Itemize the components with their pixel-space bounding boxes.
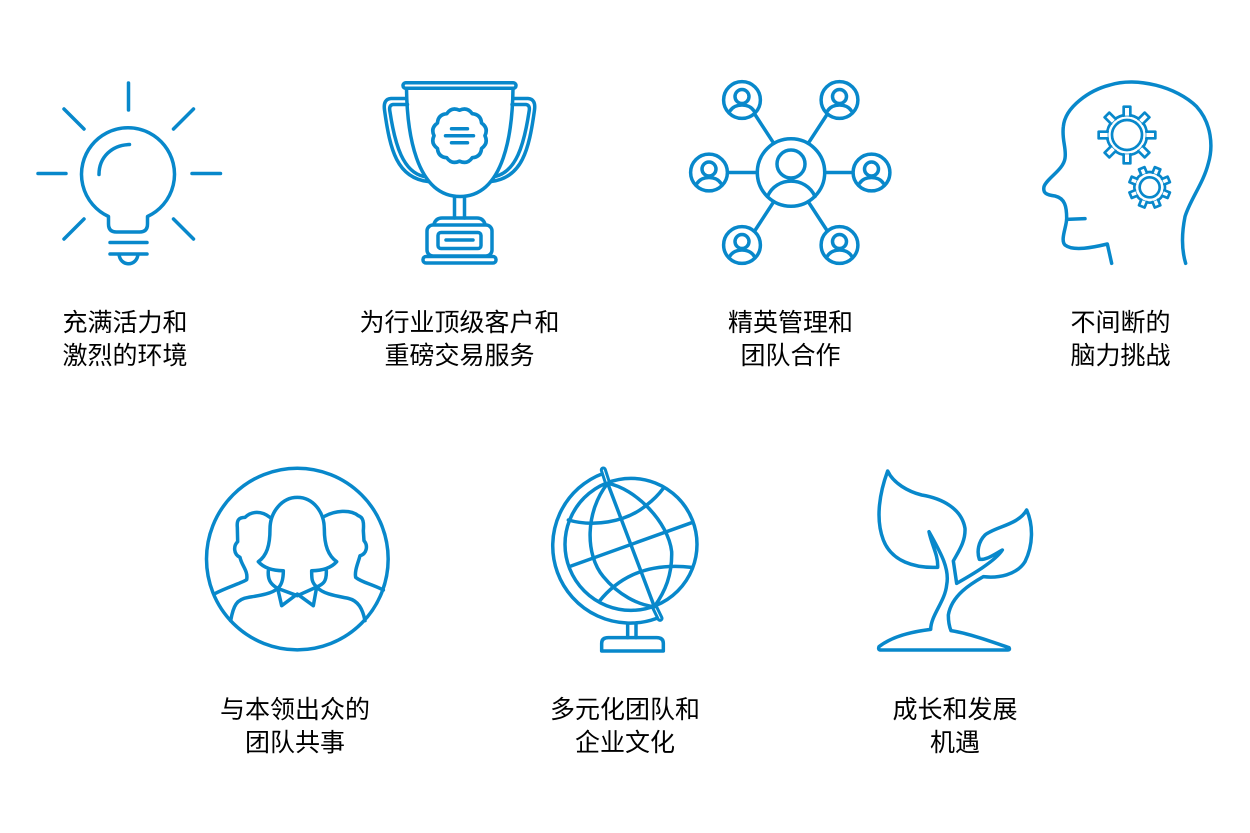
- label: growth: [892, 696, 1018, 757]
- node: middle right: [853, 154, 890, 191]
- label: growth: 机遇: [930, 729, 980, 757]
- node: middle left: [691, 154, 727, 191]
- label: diverse team: 多元化团队和: [550, 696, 700, 724]
- label: elite management: 精英管理和: [728, 309, 853, 337]
- icon: globe: [553, 470, 697, 651]
- label: outstanding team: 与本领出众的: [220, 696, 370, 724]
- label: brain challenge: [1070, 309, 1171, 370]
- panel: diverse team: [550, 470, 700, 757]
- icon: trophy: [384, 83, 535, 263]
- label: elite management: [728, 309, 853, 370]
- label: top clients: 重磅交易服务: [384, 342, 535, 370]
- node: top right: [821, 82, 858, 118]
- icon: sprout: [879, 471, 1031, 650]
- panel: brain challenge: [1044, 82, 1211, 370]
- gear: small: [1129, 167, 1170, 208]
- label: vibrant environment: 充满活力和: [62, 309, 188, 337]
- panel: elite management: [691, 82, 890, 370]
- icon: three people in circle: [206, 468, 388, 650]
- icon: head with gears: [1044, 82, 1211, 263]
- label: growth: 成长和发展: [892, 696, 1018, 724]
- label: diverse team: 企业文化: [575, 729, 675, 757]
- node: top left: [724, 82, 760, 118]
- gear: large: [1099, 107, 1155, 163]
- icon: light bulb: [38, 83, 220, 264]
- label: top clients: [359, 309, 560, 370]
- panel: vibrant environment: [38, 83, 220, 370]
- label: brain challenge: 不间断的: [1070, 309, 1171, 337]
- label: brain challenge: 脑力挑战: [1070, 342, 1171, 370]
- panel: top clients: [359, 83, 560, 370]
- label: outstanding team: 团队共事: [245, 729, 345, 757]
- label: outstanding team: [220, 696, 370, 757]
- label: vibrant environment: [62, 309, 188, 370]
- panel: growth: [879, 471, 1031, 757]
- label: top clients: 为行业顶级客户和: [359, 309, 560, 337]
- label: diverse team: [550, 696, 700, 757]
- node: bottom right: [821, 227, 858, 263]
- label: elite management: 团队合作: [740, 342, 841, 370]
- node: bottom left: [724, 227, 760, 263]
- label: vibrant environment: 激烈的环境: [62, 342, 188, 370]
- panel: outstanding team: [206, 468, 388, 757]
- icon: people network: [691, 82, 890, 263]
